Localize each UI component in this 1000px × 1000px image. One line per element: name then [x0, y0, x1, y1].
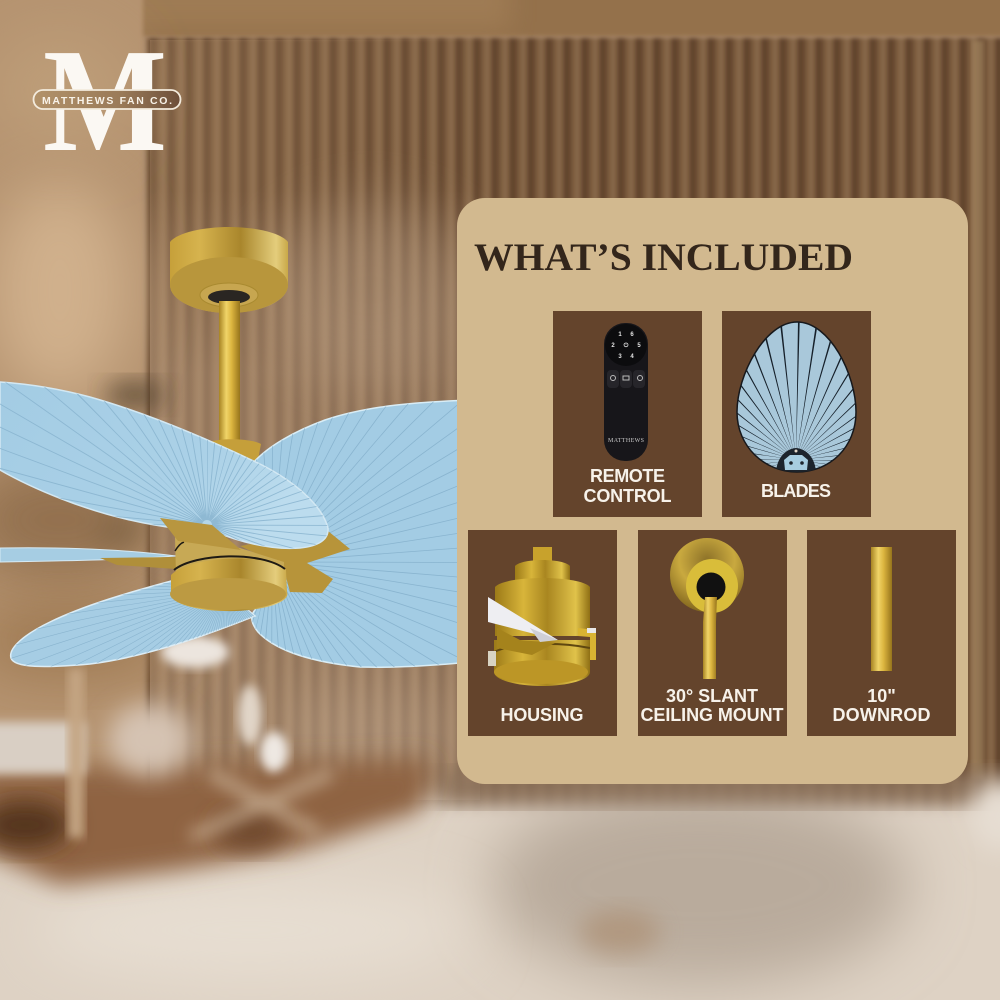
card: blades [722, 311, 871, 532]
floor [0, 772, 1000, 1000]
label: DOWNROD [832, 705, 930, 725]
blade hub [784, 450, 808, 470]
heading: WHAT’S INCLUDED [474, 236, 853, 279]
logo monogram letter: M [43, 19, 167, 183]
label: BLADES [761, 481, 831, 501]
icon: palm blade [736, 321, 857, 473]
dark blurred plant and shadows [0, 381, 170, 675]
card: housing [468, 530, 617, 736]
icon: remote: 1 [618, 332, 622, 338]
label: CEILING MOUNT [640, 705, 784, 725]
logo name text: MATTHEWS FAN CO. [42, 95, 172, 107]
label: HOUSING [500, 705, 584, 725]
fan downrod [219, 301, 240, 446]
label: REMOTE [590, 466, 665, 486]
ceiling band [142, 0, 1000, 37]
logo name pill [34, 90, 180, 109]
label: 30° SLANT [666, 686, 758, 706]
icon: remote: MATTHEWS [608, 438, 644, 444]
label [832, 686, 930, 725]
blurred chair and furniture [0, 636, 332, 838]
card: slant ceiling mount [638, 530, 787, 736]
fan canopy [170, 227, 288, 313]
icon: remote: 3 [618, 354, 622, 360]
icon: remote: ⏻ [624, 342, 629, 349]
gold blade brackets [100, 531, 350, 593]
card: downrod [807, 530, 956, 736]
label [584, 466, 672, 506]
icon: remote [604, 323, 648, 461]
icon: remote: 6 [630, 332, 634, 338]
top left blade [0, 381, 329, 550]
motor housing [170, 537, 287, 611]
icon: ceiling mount [670, 538, 744, 679]
logo: Matthews Fan Co. [34, 19, 180, 183]
icon: downrod [871, 547, 892, 671]
lower left blade [10, 580, 256, 668]
slatted wood wall [146, 38, 1000, 818]
label [640, 686, 784, 725]
icon: housing [488, 547, 596, 686]
fan rod coupler [209, 439, 261, 470]
icon: remote: 4 [630, 354, 634, 360]
top bracket [160, 518, 241, 550]
panel background [457, 198, 968, 784]
wall light overlays [150, 40, 984, 800]
icon: remote: 2 [611, 343, 615, 349]
label: 10" [867, 686, 896, 706]
left wall light patches [0, 30, 130, 400]
panel: what's included [457, 198, 968, 784]
right blades [251, 400, 457, 668]
icon: remote: 5 [637, 343, 641, 349]
ceiling fan [0, 227, 457, 668]
brown rug area [0, 760, 430, 885]
card: remote control [553, 311, 702, 517]
left wall [0, 0, 143, 780]
far thin blade [0, 548, 176, 562]
label: CONTROL [584, 486, 672, 506]
